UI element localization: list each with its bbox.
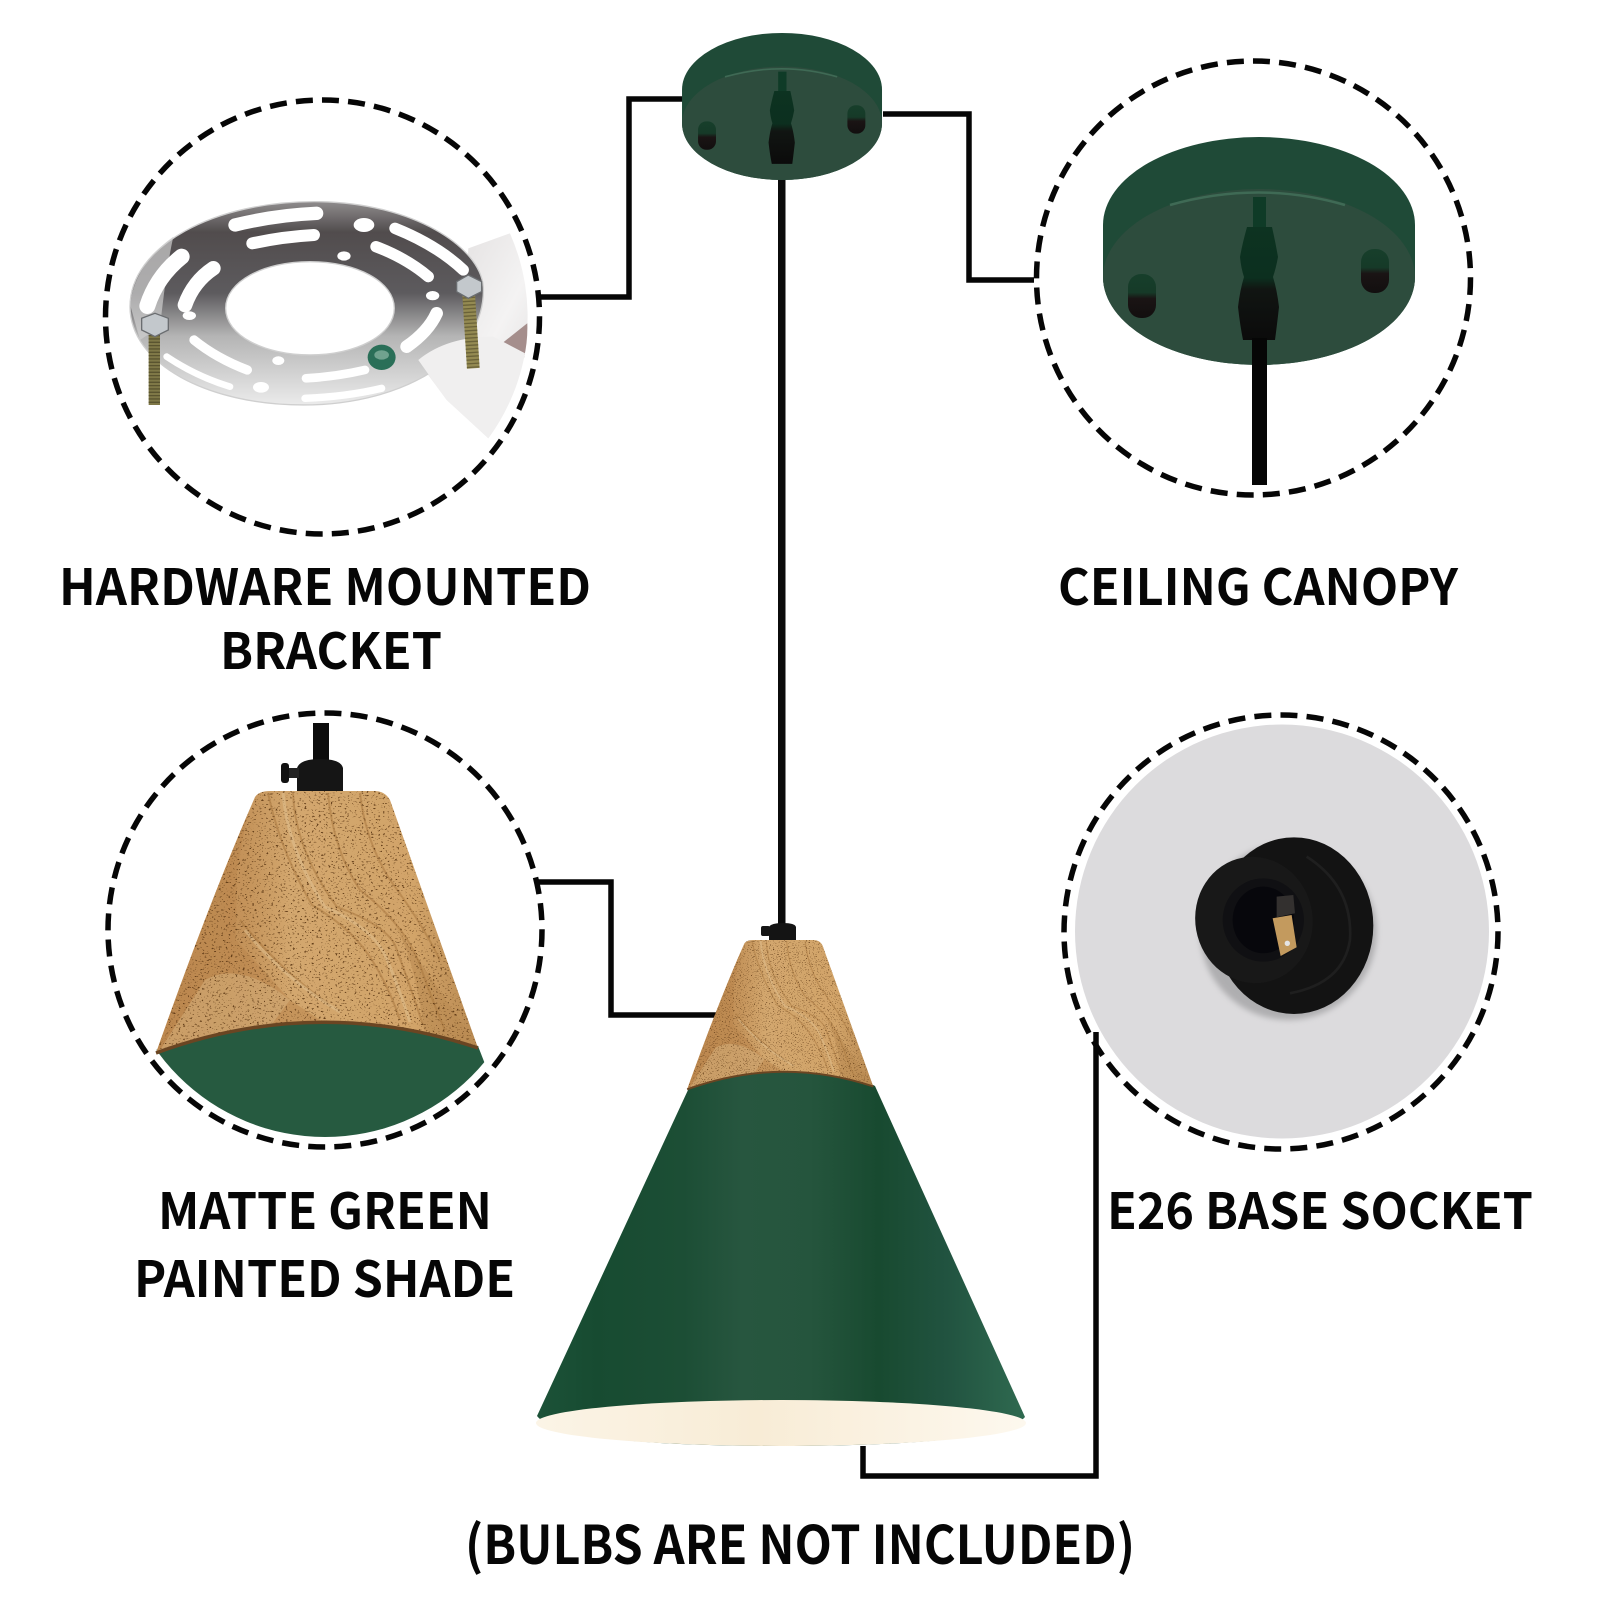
footnote: bulbs not included: (BULBS ARE NOT INCLUDED) [465,1504,1135,1580]
canopy to bracket connector line [541,99,684,297]
heading: hardware mounted bracket: BRACKET [220,612,442,684]
icon: canopy cord [1252,338,1267,485]
bracket plate [130,202,483,405]
panel: ceiling canopy [1036,61,1470,495]
pendant lamp [536,33,1026,1446]
canopy to ceiling canopy connector line [883,114,1034,280]
heading: matte green painted shade: PAINTED SHADE [134,1240,515,1312]
dashed circle [108,713,542,1147]
grey backdrop [1075,724,1489,1138]
cloth behind bracket [418,233,528,438]
icon: shade inner green [156,1024,484,1137]
heading: matte green painted shade [134,1172,515,1312]
wood cap to shade detail connector line [537,882,716,1015]
panel: hardware mounted bracket [106,100,540,534]
panel: E26 base socket [1064,715,1498,1149]
icon: wood cap [150,791,480,1060]
heading: E26 base socket: E26 BASE SOCKET [1107,1172,1533,1244]
cloth front fold [418,337,525,438]
dashed circle [106,100,540,534]
dashed circle [1064,715,1498,1149]
icon: ceiling canopy small [682,33,882,180]
heading: hardware mounted bracket: HARDWARE MOUNTED [59,548,591,620]
dashed circle [1036,61,1470,495]
green metal shade [537,1059,1025,1446]
heading: hardware mounted bracket [59,548,591,684]
green screw [368,345,396,370]
cord [778,150,786,930]
white inner shade [536,1400,1026,1446]
collar and knob [761,923,796,942]
icon: cord and collar [281,723,343,791]
heading: matte green painted shade: MATTE GREEN [158,1172,492,1244]
icon: canopy close-up [1103,137,1415,365]
bolts [154,293,473,405]
icon: socket [1185,837,1377,1020]
wood cap [684,940,874,1093]
icon: mounting bracket photo [130,202,528,438]
panel: matte green painted shade [108,713,542,1160]
heading: ceiling canopy: CEILING CANOPY [1058,548,1459,620]
shade to socket connector line [863,1032,1096,1476]
